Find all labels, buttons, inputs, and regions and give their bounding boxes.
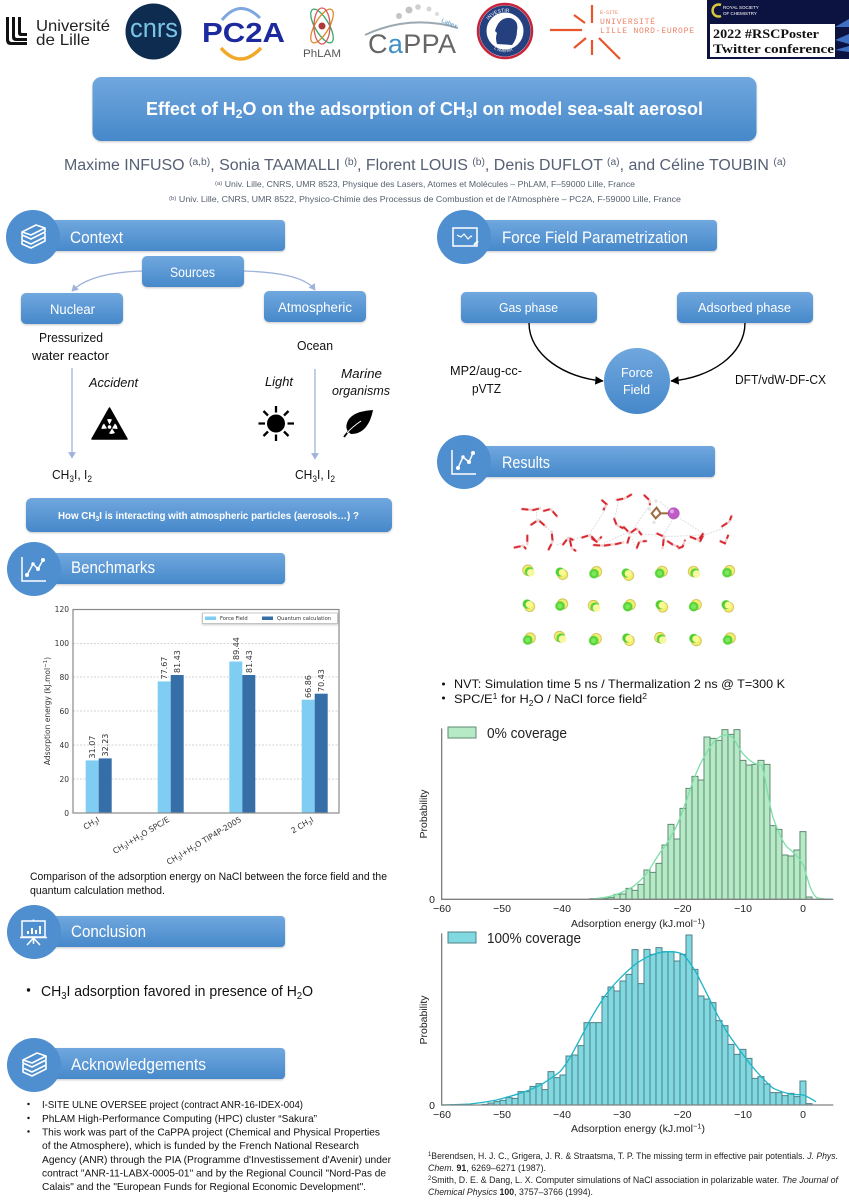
icon: sun — [258, 406, 294, 441]
references: Chem. 91, 6269–6271 (1987). — [428, 1163, 546, 1174]
text: simulation details — [442, 677, 785, 708]
title banner: 3 — [466, 107, 473, 121]
list: funding acknowledgements: I-SITE ULNE OVERSEE project (contract ANR-16-IDEX-004) — [42, 1100, 303, 1111]
x axis category labels: CH — [111, 842, 126, 856]
value labels: 81.43 — [173, 650, 182, 673]
CH3I molecule — [648, 500, 679, 524]
value labels: 31.07 — [88, 736, 97, 758]
logo: I-SITE ULNE: LILLE NORD-EUROPE — [600, 27, 694, 36]
y axis ticks: 40 — [59, 741, 69, 750]
text: simulation details: 1 — [493, 692, 498, 701]
legend — [448, 726, 567, 742]
box: Nuclear: Nuclear — [50, 302, 95, 317]
box: Atmospheric — [264, 291, 366, 322]
label: marine organisms: Marine — [341, 366, 382, 381]
axis labels: ) — [702, 918, 705, 930]
authors: (a,b) — [189, 157, 210, 168]
axis labels: −50 — [493, 1109, 511, 1121]
logo: Investir l'Avenir: INVESTIR — [486, 8, 510, 20]
panel: context — [6, 210, 392, 532]
list: funding acknowledgements: of the Atmosphere), which is funded by the French National Research — [42, 1141, 359, 1152]
axis labels: 0 — [429, 1100, 435, 1112]
callout: research question: 3 — [95, 514, 99, 523]
label: MP2 method: MP2/aug-cc- — [450, 363, 522, 378]
axis labels: Probability — [418, 789, 430, 839]
heading: Force Field Parametrization: Force Field Parametrization — [502, 228, 688, 247]
text: ocean: Ocean — [297, 338, 333, 353]
logo: I-SITE ULNE: UNIVERSITÉ — [600, 18, 655, 27]
x axis category labels: 3 — [308, 820, 315, 827]
panel: force field parametrization — [437, 210, 826, 414]
logo: PhLAM: PhLAM — [303, 48, 341, 60]
axis labels: 0 — [800, 903, 806, 915]
node: force field — [604, 348, 670, 414]
icon: line chart — [22, 557, 46, 581]
value labels: 70.43 — [317, 669, 326, 692]
density curve — [442, 952, 816, 1105]
text: conclusion bullet: 3 — [61, 991, 67, 1002]
text: pressurized water reactor — [31, 330, 110, 363]
logo: Investir l'Avenir: L'AVENIR — [494, 46, 513, 52]
y axis label: −1 — [43, 660, 49, 668]
axis labels: −50 — [493, 903, 511, 915]
callout: research question — [26, 498, 392, 532]
x axis category labels: 3 — [177, 855, 184, 863]
x axis category labels: 2 — [139, 835, 145, 842]
axis labels — [418, 789, 806, 930]
title banner — [92, 77, 756, 141]
text: CH3I, I2 nuclear: 3 — [69, 474, 74, 484]
value labels: 89.44 — [232, 637, 241, 660]
hydrogen bonds — [537, 502, 723, 548]
axis labels: −40 — [553, 1109, 571, 1121]
density curve — [590, 735, 832, 899]
label: marine organisms — [332, 366, 390, 398]
text: pressurized water reactor: water reactor — [31, 348, 110, 363]
text: CH3I, I2 atmospheric: CH — [295, 467, 314, 482]
axes — [442, 728, 833, 899]
heading: Conclusion — [7, 905, 285, 959]
label: MP2 method — [450, 363, 522, 396]
histogram: 100% coverage — [418, 931, 833, 1135]
y axis ticks: 80 — [59, 673, 69, 682]
value labels — [88, 637, 326, 758]
box: Sources — [142, 256, 244, 287]
authors: (b) — [472, 157, 485, 168]
authors: (a) — [773, 157, 786, 168]
water molecules — [514, 494, 732, 551]
box: gas phase: Gas phase — [499, 300, 558, 315]
text: conclusion bullet: 2 — [297, 991, 302, 1002]
axis labels: −10 — [734, 1109, 752, 1121]
legend: 100% coverage — [487, 931, 581, 947]
logo: RSC poster conference — [707, 0, 849, 59]
NaCl lattice — [523, 565, 735, 646]
text: simulation details: 2 — [642, 692, 648, 701]
axis labels: −60 — [433, 1109, 451, 1121]
text: pressurized water reactor: Pressurized — [39, 330, 103, 345]
callout: research question: How CH — [58, 510, 98, 522]
list: funding acknowledgements: This work was part of the CaPPA project (Chemical and Physical Properties — [42, 1128, 380, 1138]
logo: Investir l'Avenir — [476, 2, 534, 60]
text: simulation details: for H — [497, 692, 529, 706]
logo: CNRS: cnrs — [130, 13, 178, 43]
x axis category labels — [82, 815, 316, 868]
logo: RSC poster conference: 2022 #RSCPoster — [713, 26, 819, 41]
axis labels: 0 — [429, 894, 435, 906]
text: simulation details: O / NaCl force field — [534, 692, 642, 706]
axes — [442, 933, 833, 1105]
text: CH3I, I2 nuclear: 2 — [87, 474, 92, 484]
references: 1 — [428, 1151, 432, 1158]
logo: Université de Lille — [6, 17, 110, 49]
text: simulation details: NVT: Simulation time 5 ns / Thermalization 2 ns @ T=300 K — [454, 677, 785, 691]
text: CH3I, I2 atmospheric: 3 — [312, 474, 317, 484]
box: gas phase — [461, 292, 597, 323]
logo: RSC poster conference: Twitter conference — [713, 41, 834, 56]
logo: PC2A: PC2A — [202, 17, 285, 48]
node: force field: Field — [623, 382, 650, 397]
text: conclusion bullet: O — [302, 983, 313, 1000]
axis labels — [418, 995, 806, 1135]
title banner: Effect of H — [146, 99, 236, 119]
axis labels: −1 — [693, 1122, 702, 1130]
icon: leaf — [344, 410, 373, 437]
x axis category labels: I — [308, 815, 315, 824]
authors: (b) — [344, 157, 357, 168]
box: Atmospheric: Atmospheric — [278, 300, 352, 315]
references — [428, 1151, 839, 1198]
authors: (a) — [607, 157, 620, 168]
references: Smith, D. E. & Dang, L. X. Computer simulations of NaCl association in polarizable water. — [431, 1175, 782, 1186]
icon: monitor — [453, 228, 478, 246]
y axis ticks: 0 — [64, 809, 69, 818]
y axis ticks: 100 — [55, 639, 69, 648]
arrows into force field — [529, 323, 745, 381]
axis labels: −40 — [553, 903, 571, 915]
icon: radiation warning — [92, 408, 127, 439]
authors: , Denis DUFLOT — [485, 157, 607, 174]
text: CH3I, I2 atmospheric: I, I — [317, 467, 330, 482]
y axis ticks: 20 — [59, 775, 69, 784]
heading: Context: Context — [70, 228, 123, 247]
logo: RSC poster conference: ROYAL SOCIETY — [723, 5, 759, 10]
axis labels: −30 — [613, 903, 631, 915]
references: J. Phys. — [806, 1151, 838, 1162]
legend: Force Field — [220, 616, 248, 622]
caption: quantum calculation method. — [30, 885, 165, 897]
affiliation a: Univ. Lille, CNRS, UMR 8523, Physique des Lasers, Atomes et Molécules – PhLAM, F–59000 Lille, France — [222, 180, 636, 189]
y axis ticks: 120 — [55, 605, 69, 614]
heading: Acknowledgements: Acknowledgements — [71, 1055, 206, 1074]
legend: 0% coverage — [487, 726, 567, 742]
authors: , and Céline TOUBIN — [620, 157, 773, 174]
label: MP2 method: pVTZ — [472, 381, 501, 396]
label: DFT method: DFT/vdW-DF-CX — [735, 372, 826, 387]
list: funding acknowledgements: contract "ANR-11-LABX-0005-01" and by the Regional Council "Nord-Pas de — [42, 1168, 386, 1180]
title banner: I on model sea-salt aerosol — [473, 99, 703, 119]
heading: Results: Results — [502, 453, 550, 472]
title banner: O on the adsorption of CH — [242, 99, 466, 119]
axis labels: 0 — [800, 1109, 806, 1121]
x axis category labels: CH — [165, 853, 179, 867]
x axis category labels: 2 — [193, 846, 199, 853]
icon: line chart — [452, 450, 476, 474]
callout: research question: I is interacting with atmospheric particles (aerosols…) ? — [99, 510, 359, 522]
panel: results — [418, 435, 839, 1198]
flow: sources branches — [72, 271, 315, 459]
authors: , Florent LOUIS — [357, 157, 472, 174]
x axis category labels: I+H — [124, 833, 141, 848]
bars: quantum calculation — [99, 675, 328, 813]
caption — [30, 871, 387, 897]
list: funding acknowledgements: Agency (ANR) through the PIA (Programme d'Investissement d'Avenir) under — [42, 1155, 392, 1166]
heading: Results — [437, 435, 715, 489]
box: Nuclear — [21, 293, 123, 324]
heading: Conclusion: Conclusion — [71, 922, 146, 941]
heading: Acknowledgements — [7, 1038, 285, 1092]
authors: , Sonia TAAMALLI — [210, 157, 344, 174]
x axis category labels: CH — [82, 818, 96, 832]
legend: Quantum calculation — [277, 616, 331, 622]
axis labels: −1 — [693, 916, 702, 926]
logo: I-SITE ULNE — [550, 5, 694, 59]
text: simulation details: 2 — [529, 699, 534, 708]
bars — [482, 935, 812, 1105]
panel: benchmarks — [7, 542, 387, 897]
simulation snapshot: water and CH3I on NaCl — [514, 494, 735, 646]
heading: Context — [6, 210, 285, 264]
label: light: Light — [265, 374, 294, 389]
text: conclusion bullet: I adsorption favored in presence of H — [67, 983, 297, 1000]
panel: conclusion — [7, 905, 313, 1002]
logo: Université de Lille: de Lille — [36, 32, 90, 49]
logo: I-SITE ULNE: E-SITE — [600, 10, 618, 16]
text: simulation details: SPC/E — [454, 692, 490, 706]
y axis ticks — [55, 605, 69, 818]
x axis category labels: O SPC/E — [140, 815, 171, 839]
text: conclusion bullet: CH — [41, 983, 63, 1000]
axis labels: −60 — [433, 903, 451, 915]
logo: CaPPA Labex: CaPPA — [368, 29, 456, 59]
value labels: 66.86 — [304, 675, 313, 698]
logo: RSC poster conference: OF CHEMISTRY — [723, 11, 757, 16]
icon: presentation board — [20, 920, 47, 945]
axis labels: −10 — [734, 903, 752, 915]
axis labels: Probability — [418, 995, 430, 1045]
references: Berendsen, H. J. C., Grigera, J. R. & Straatsma, T. P. The missing term in effective pair potentials. — [431, 1151, 807, 1162]
axis labels: −20 — [674, 903, 692, 915]
heading: Force Field Parametrization — [437, 210, 717, 264]
box: Sources: Sources — [170, 265, 215, 280]
affiliation a: (a) — [215, 181, 222, 187]
legend — [202, 613, 338, 624]
axis labels: −30 — [613, 1109, 631, 1121]
label: accident: Accident — [88, 375, 139, 390]
x axis category labels: I — [94, 815, 101, 824]
caption: Comparison of the adsorption energy on NaCl between the force field and the — [30, 871, 387, 883]
histogram: 0% coverage — [418, 726, 833, 930]
logo: Université de Lille: Université — [36, 18, 110, 35]
logo: PhLAM — [303, 6, 341, 60]
axis labels: Adsorption energy (kJ.mol — [571, 918, 693, 930]
y axis ticks: 60 — [59, 707, 69, 716]
logo: PC2A — [202, 8, 285, 59]
x axis category labels: 3 — [94, 820, 101, 827]
legend — [448, 931, 581, 947]
value labels: 77.67 — [160, 657, 169, 680]
text: CH3I, I2 atmospheric: 2 — [330, 474, 335, 484]
heading: Benchmarks — [7, 542, 285, 596]
text: CH3I, I2 nuclear: I, I — [74, 467, 87, 482]
logo: CaPPA Labex: Labex — [440, 18, 458, 30]
value labels: 81.43 — [245, 650, 254, 673]
axis labels: −20 — [674, 1109, 692, 1121]
x axis category labels: 3 — [124, 845, 130, 852]
y axis label: Adsorption energy (kJ.mol — [43, 668, 52, 765]
references: 2 — [428, 1175, 432, 1182]
x axis category labels: 2 CH — [289, 818, 310, 835]
box: adsorbed phase: Adsorbed phase — [698, 300, 791, 315]
list: funding acknowledgements — [27, 1100, 392, 1193]
text: CH3I, I2 nuclear: CH — [52, 467, 71, 482]
logo: CNRS — [126, 4, 182, 60]
x axis category labels: I+H — [178, 844, 195, 859]
label: marine organisms: organisms — [332, 383, 390, 398]
value labels: 32.23 — [101, 734, 110, 756]
list: funding acknowledgements: PhLAM High-Performance Computing (HPC) cluster “Sakura” — [42, 1114, 318, 1125]
icon: books — [22, 225, 45, 248]
bars: force field — [86, 662, 315, 813]
bars — [590, 730, 812, 899]
heading: Benchmarks: Benchmarks — [71, 558, 155, 577]
list: funding acknowledgements: Calais" and the "European Funds for Regional Economic Development". — [42, 1182, 366, 1193]
icon: books — [23, 1053, 46, 1076]
authors: Maxime INFUSO — [64, 157, 181, 174]
axis labels: Adsorption energy (kJ.mol — [571, 1123, 693, 1135]
node: force field: Force — [621, 365, 653, 380]
affiliation b: Univ. Lille, CNRS, UMR 8522, Physico-Chimie des Processus de Combustion et de l'Atmosphère – PC2A, F-59000 Lille, France — [176, 195, 682, 204]
panel: acknowledgements — [7, 1038, 392, 1193]
title banner: 2 — [236, 107, 243, 121]
axis labels: ) — [702, 1123, 705, 1135]
bar chart: adsorption energy — [43, 605, 339, 868]
y axis label: ) — [43, 657, 52, 660]
logo: CaPPA Labex — [365, 4, 458, 59]
box: adsorbed phase — [677, 292, 813, 323]
references: Chemical Physics 100, 3757–3766 (1994). — [428, 1187, 593, 1198]
affiliation b: (b) — [169, 196, 177, 202]
references: The Journal of — [782, 1175, 839, 1186]
x axis category labels: O TIP4P-2005 — [193, 815, 243, 850]
